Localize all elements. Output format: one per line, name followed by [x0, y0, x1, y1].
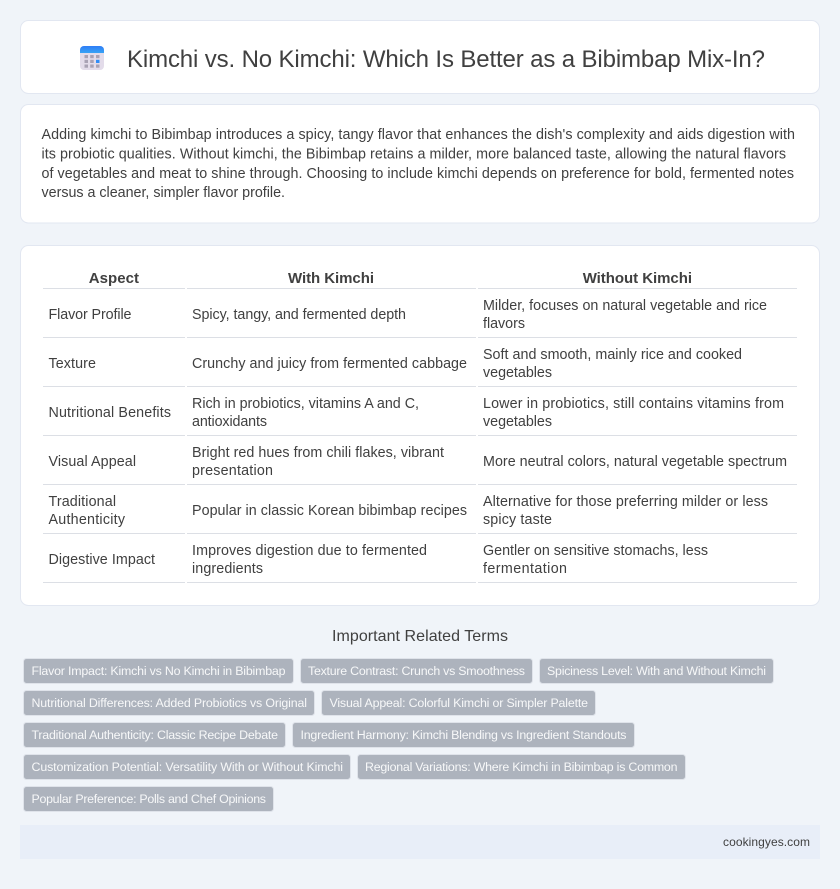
tag: popular preference — [24, 786, 274, 812]
row: flavor profile: flavors — [483, 316, 525, 332]
table header — [43, 270, 797, 289]
tag: spiciness level — [540, 658, 774, 684]
row: nutritional benefits: Rich in probiotics, vitamins A and C, — [192, 396, 419, 412]
table header: Aspect — [89, 270, 139, 287]
row: nutritional benefits: Lower in probiotics, still contains vitamins from — [483, 396, 784, 412]
row: traditional authenticity: Alternative for those preferring milder or less — [483, 494, 768, 510]
tag: flavor impact — [24, 658, 294, 684]
row: nutritional benefits: Nutritional Benefits — [48, 405, 171, 421]
intro text — [42, 127, 795, 201]
icon: calendar — [80, 46, 104, 70]
intro text: its probiotic qualities. Without kimchi, the Bibimbap retains a milder, more balanced taste, allowing the natural flavors — [42, 146, 786, 162]
tag: flavor impact: Flavor Impact: Kimchi vs No Kimchi in Bibimbap — [32, 664, 286, 678]
table header: Without Kimchi — [583, 270, 692, 287]
intro text: of vegetables and meat to shine through. Choosing to include kimchi depends on preference for bold, fermented notes — [42, 166, 794, 182]
row: flavor profile: Flavor Profile — [48, 307, 132, 323]
tag: traditional authenticity: Traditional Authenticity: Classic Recipe Debate — [32, 728, 278, 742]
row: traditional authenticity: Traditional — [48, 494, 116, 510]
tag: ingredient harmony: Ingredient Harmony: Kimchi Blending vs Ingredient Standouts — [300, 728, 626, 742]
tag: regional variations — [358, 754, 686, 780]
panel: introduction — [20, 104, 820, 223]
title: Kimchi vs. No Kimchi: Which Is Better as a Bibimbap Mix-In? — [127, 46, 765, 73]
tag: ingredient harmony — [292, 722, 634, 748]
intro text: versus a cleaner, simpler flavor profile. — [42, 185, 285, 201]
row: texture: vegetables — [483, 365, 552, 381]
row: visual appeal: Visual Appeal — [48, 454, 136, 470]
tag: texture contrast — [300, 658, 532, 684]
row: texture — [43, 347, 797, 387]
row: traditional authenticity: Popular in classic Korean bibimbap recipes — [192, 503, 467, 519]
tag: texture contrast: Texture Contrast: Crunch vs Smoothness — [308, 664, 525, 678]
row: traditional authenticity: spicy taste — [483, 512, 552, 528]
tag: visual appeal: Visual Appeal: Colorful Kimchi or Simpler Palette — [330, 696, 588, 710]
tag: visual appeal — [322, 690, 596, 716]
row: flavor profile: Milder, focuses on natural vegetable and rice — [483, 298, 767, 314]
row: digestive impact: Digestive Impact — [48, 552, 155, 568]
row: digestive impact — [43, 543, 797, 583]
panel: comparison table — [20, 246, 820, 606]
row: digestive impact: Gentler on sensitive stomachs, less — [483, 543, 708, 559]
tag: traditional authenticity — [24, 722, 286, 748]
tag: customization potential: Customization Potential: Versatility With or Without Kimchi — [32, 760, 343, 774]
row: texture: Soft and smooth, mainly rice and cooked — [483, 347, 742, 363]
tag: nutritional differences: Nutritional Differences: Added Probiotics vs Original — [32, 696, 307, 710]
row: digestive impact: fermentation — [483, 561, 567, 577]
tag: popular preference: Popular Preference: Polls and Chef Opinions — [32, 792, 266, 806]
row: visual appeal: More neutral colors, natural vegetable spectrum — [483, 454, 787, 470]
row: traditional authenticity — [43, 494, 797, 534]
related term tags — [24, 658, 774, 812]
footer source text: cookingyes.com — [723, 835, 810, 849]
row: nutritional benefits: antioxidants — [192, 414, 267, 430]
row: nutritional benefits — [43, 396, 797, 436]
footer — [20, 825, 820, 859]
row: flavor profile: Spicy, tangy, and fermented depth — [192, 307, 406, 323]
row: texture: Texture — [48, 356, 96, 372]
tag: regional variations: Regional Variations: Where Kimchi in Bibimbap is Common — [365, 760, 678, 774]
intro text: Adding kimchi to Bibimbap introduces a spicy, tangy flavor that enhances the dish's complexity and aids digestion with — [42, 127, 795, 143]
row: visual appeal: presentation — [192, 463, 273, 479]
row: traditional authenticity: Authenticity — [48, 512, 126, 528]
row: flavor profile — [43, 298, 797, 338]
row: digestive impact: Improves digestion due to fermented — [192, 543, 427, 559]
row: nutritional benefits: vegetables — [483, 414, 552, 430]
table header: With Kimchi — [288, 270, 374, 287]
row: visual appeal — [43, 445, 797, 485]
tag: customization potential — [24, 754, 350, 780]
row: digestive impact: ingredients — [192, 561, 263, 577]
tag: nutritional differences — [24, 690, 314, 716]
heading: important related terms: Important Related Terms — [332, 628, 508, 645]
title panel — [20, 20, 820, 94]
row: visual appeal: Bright red hues from chili flakes, vibrant — [192, 445, 444, 461]
row: texture: Crunchy and juicy from fermented cabbage — [192, 356, 467, 372]
tag: spiciness level: Spiciness Level: With and Without Kimchi — [547, 664, 766, 678]
